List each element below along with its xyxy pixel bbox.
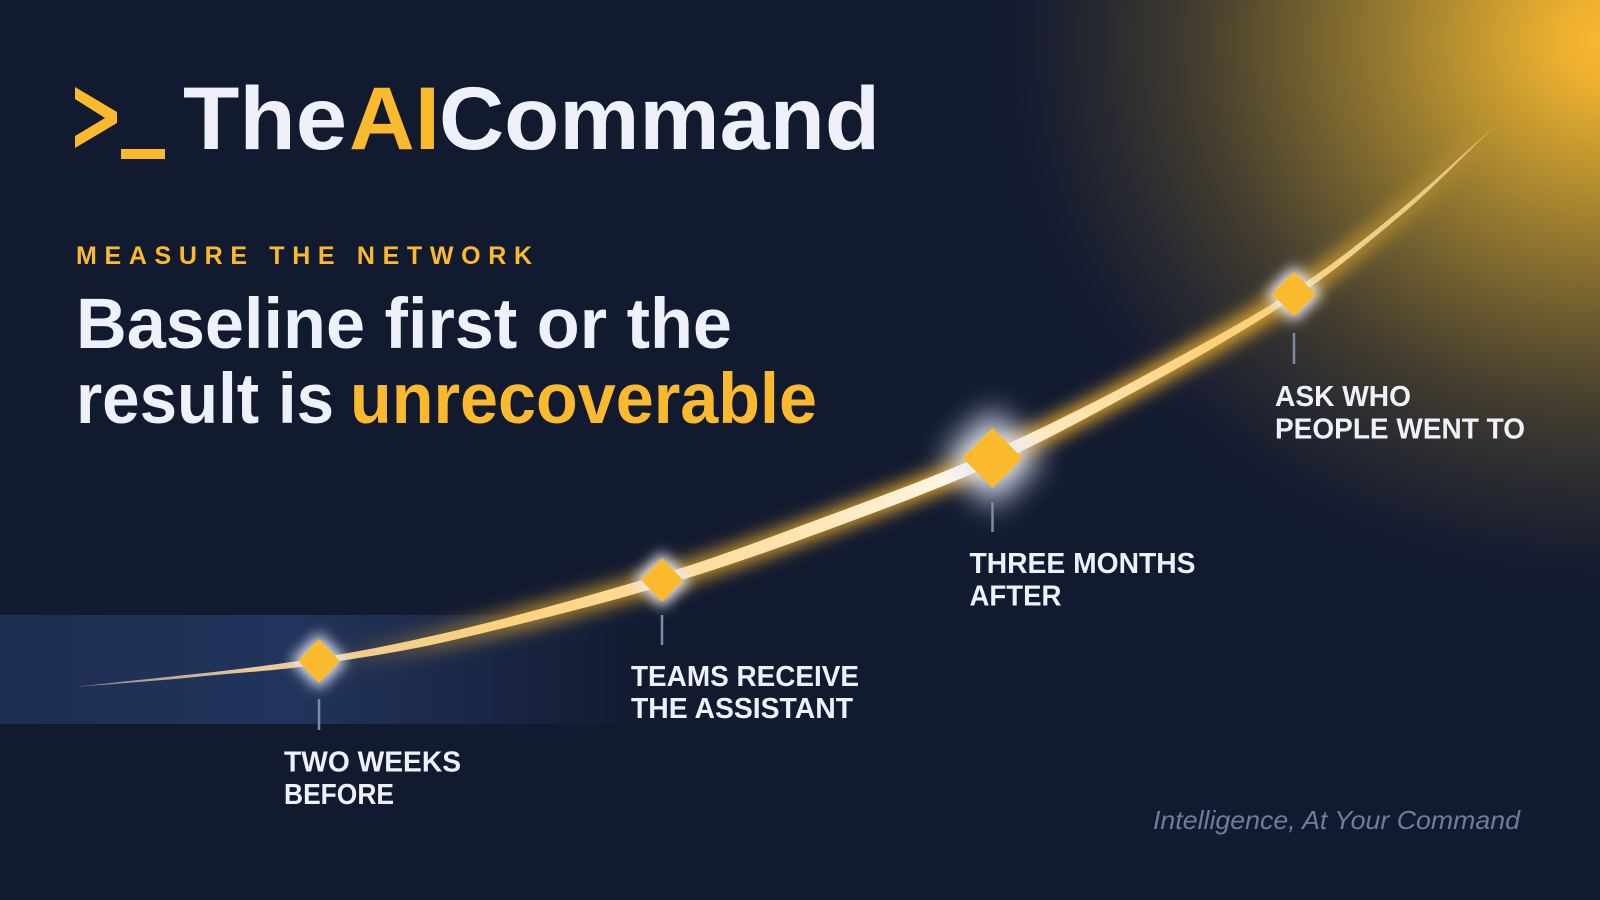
marker glow: [1266, 266, 1322, 322]
milestone: teams receive the assistant: [631, 552, 859, 725]
milestone: ask who people went to: [1266, 266, 1525, 446]
label: PEOPLE WENT TO: [1275, 414, 1525, 446]
headline: unrecoverable: [350, 360, 817, 439]
wordmark: AI: [349, 68, 440, 168]
marker glow: [291, 633, 347, 689]
headline: result is: [76, 360, 334, 439]
growth curve: [76, 126, 1495, 687]
tagline: Intelligence, At Your Command: [1153, 805, 1522, 835]
tick: [1293, 333, 1295, 364]
label: TEAMS RECEIVE: [631, 661, 859, 693]
tick: [318, 699, 320, 730]
label: BEFORE: [284, 779, 394, 811]
wordmark: Command: [439, 68, 880, 168]
milestone: two weeks before: [284, 633, 461, 811]
corner sun glow: [980, 0, 1600, 602]
tick: [661, 615, 663, 645]
label: ASK WHO: [1275, 381, 1411, 413]
label: AFTER: [970, 580, 1062, 612]
marker diamond: [641, 558, 683, 602]
marker glow: [944, 410, 1040, 506]
marker diamond: [298, 639, 340, 683]
marker glow: [634, 552, 690, 608]
tick: [991, 502, 994, 532]
label: TWO WEEKS: [284, 746, 461, 778]
eyebrow: MEASURE THE NETWORK: [76, 242, 532, 270]
label: THE ASSISTANT: [631, 693, 853, 725]
marker diamond: [1272, 272, 1316, 316]
wordmark: The: [183, 68, 347, 168]
label: THREE MONTHS: [970, 548, 1196, 580]
marker diamond: [962, 428, 1022, 488]
baseline band: [0, 615, 650, 724]
milestone: three months after: [944, 410, 1196, 612]
headline: Baseline first or the: [76, 285, 732, 364]
logo: [75, 68, 880, 168]
icon: terminal prompt: [75, 87, 165, 159]
